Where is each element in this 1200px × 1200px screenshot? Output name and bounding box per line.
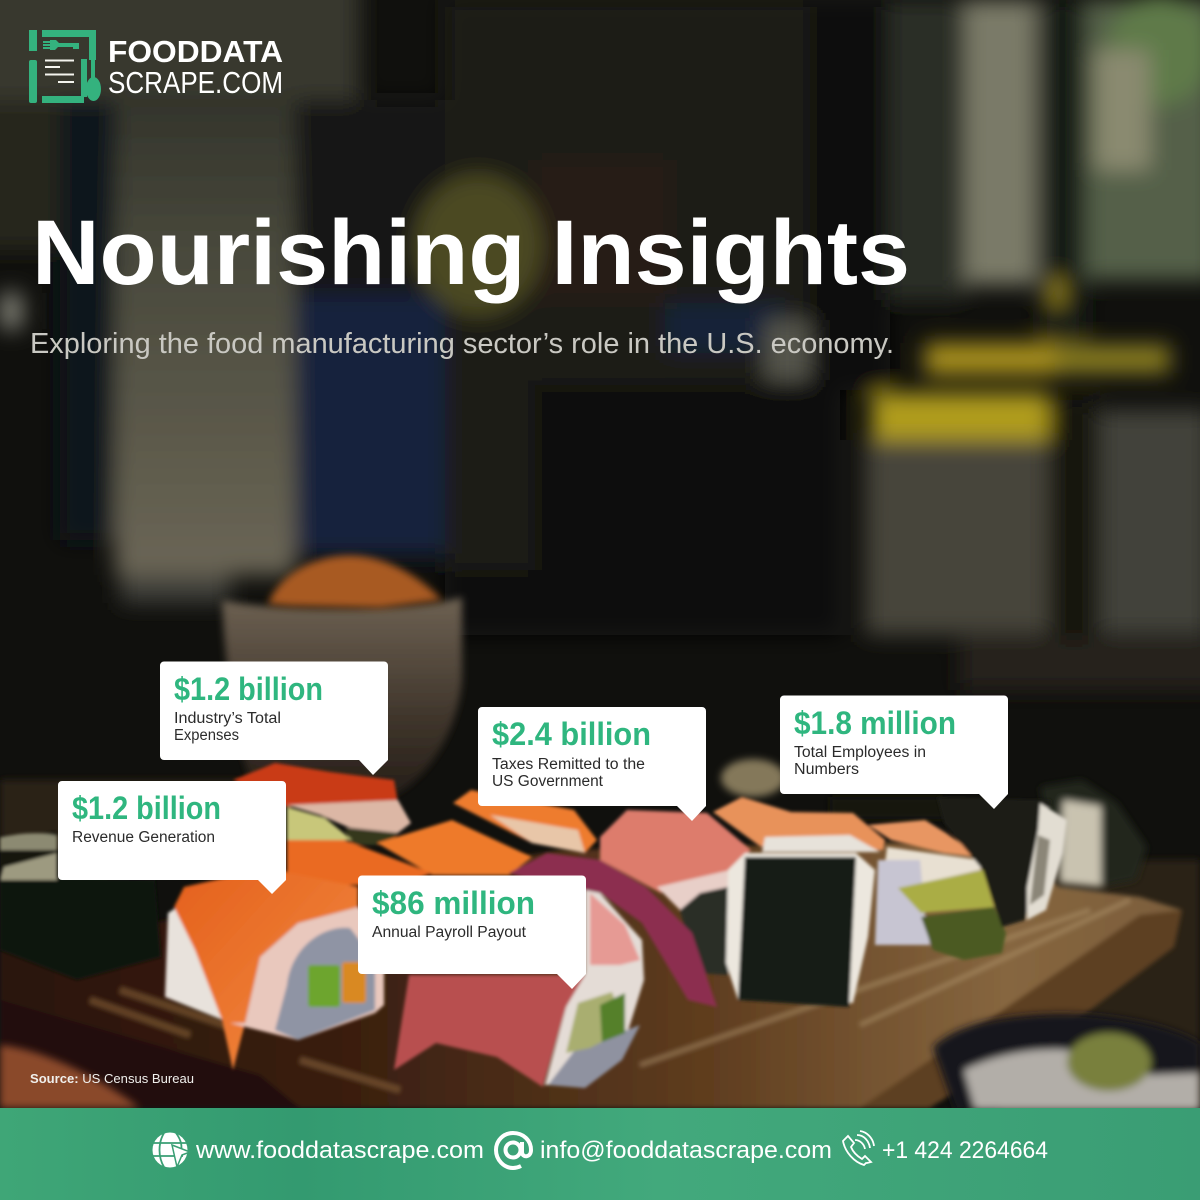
photo: blurred foreground salmon (0, 1045, 140, 1108)
callout: total employees: $1.8 million (794, 705, 956, 741)
callout: total expenses (160, 662, 388, 775)
callout: revenue generation: Revenue Generation (72, 829, 215, 846)
callout: annual payroll (358, 876, 586, 989)
callout: total employees: Total Employees in (794, 744, 926, 761)
callout: total expenses: Industry’s Total (174, 710, 281, 727)
callout: taxes remitted: US Government (492, 773, 604, 790)
callout: total expenses: $1.2 billion (174, 671, 323, 707)
title: Nourishing Insights (32, 202, 910, 304)
logo: SCRAPE.COM (108, 65, 283, 100)
photo: sushi rolls (0, 759, 1147, 1088)
footer bar (0, 1108, 1200, 1200)
callout: taxes remitted: $2.4 billion (492, 716, 651, 752)
icon: menu with fork and spoon (29, 30, 101, 103)
subtitle: Exploring the food manufacturing sector’s role in the U.S. economy. (30, 328, 894, 360)
callout: annual payroll: Annual Payroll Payout (372, 924, 527, 941)
callout: taxes remitted (478, 707, 706, 821)
callout: revenue generation: $1.2 billion (72, 790, 221, 826)
email: info@fooddatascrape.com (540, 1137, 832, 1164)
source note: Source: US Census Bureau (30, 1072, 194, 1086)
photo: seasoning bowl (933, 1014, 1200, 1110)
logo (29, 30, 283, 103)
callout: revenue generation (58, 781, 286, 894)
callout: total employees (780, 696, 1008, 809)
callout: annual payroll: $86 million (372, 885, 535, 921)
website: www.fooddatascrape.com (195, 1137, 484, 1164)
phone number: +1 424 2264664 (882, 1137, 1048, 1164)
icon: globe with cursor (152, 1132, 190, 1168)
logo: FOODDATA (108, 34, 283, 69)
photo: wooden board (0, 840, 1182, 1108)
icon: phone (843, 1131, 874, 1165)
bowl and food behind the sushi (222, 597, 462, 800)
icon: at sign (496, 1133, 531, 1168)
callout: taxes remitted: Taxes Remitted to the (492, 756, 645, 773)
callout: total expenses: Expenses (174, 727, 239, 744)
callout: total employees: Numbers (794, 761, 859, 778)
